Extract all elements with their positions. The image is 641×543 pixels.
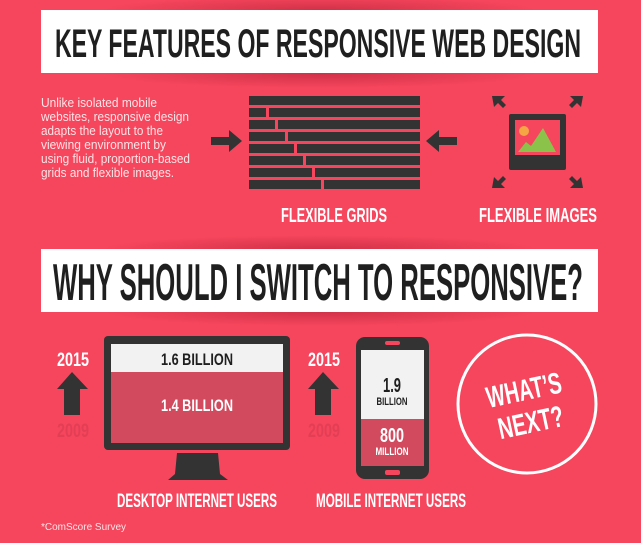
monitor chart: 1.4 BILLION xyxy=(161,396,233,415)
intro text: websites, responsive design xyxy=(40,110,189,124)
desktop year arrow: 2015 xyxy=(57,350,89,371)
monitor chart: 1.6 BILLION xyxy=(161,350,233,369)
mobile year arrow: 2015 xyxy=(308,350,340,371)
desktop year arrow xyxy=(57,350,89,442)
phone chart: MILLION xyxy=(376,446,409,458)
label: desktop users: DESKTOP INTERNET USERS xyxy=(117,491,277,512)
mobile year arrow xyxy=(308,350,340,442)
monitor chart xyxy=(104,336,290,480)
intro text: using fluid, proportion-based xyxy=(41,152,190,166)
icon: left arrow xyxy=(211,130,242,152)
callout: what's next: NEXT? xyxy=(495,400,567,446)
icon: right arrow xyxy=(426,130,457,152)
title banner: key features xyxy=(41,10,598,73)
intro text: Unlike isolated mobile xyxy=(41,96,157,110)
intro text: adapts the layout to the xyxy=(41,124,163,138)
phone chart: 1.9 xyxy=(383,375,401,397)
phone chart: BILLION xyxy=(376,396,408,408)
intro text: grids and flexible images. xyxy=(41,166,174,180)
intro text xyxy=(40,96,190,180)
icon: flexible grid xyxy=(249,96,420,189)
intro text: viewing environment by xyxy=(41,138,167,152)
callout: what's next: WHAT’S xyxy=(483,367,565,415)
footnote: *ComScore Survey xyxy=(41,522,126,533)
icon: flexible image xyxy=(492,96,583,188)
label: mobile users: MOBILE INTERNET USERS xyxy=(316,491,466,512)
phone chart xyxy=(356,337,429,479)
desktop year arrow: 2009 xyxy=(57,421,89,442)
phone chart: 800 xyxy=(380,425,404,447)
mobile year arrow: 2009 xyxy=(308,421,340,442)
callout: what's next xyxy=(458,335,596,473)
label: flexible grids: FLEXIBLE GRIDS xyxy=(281,205,387,227)
